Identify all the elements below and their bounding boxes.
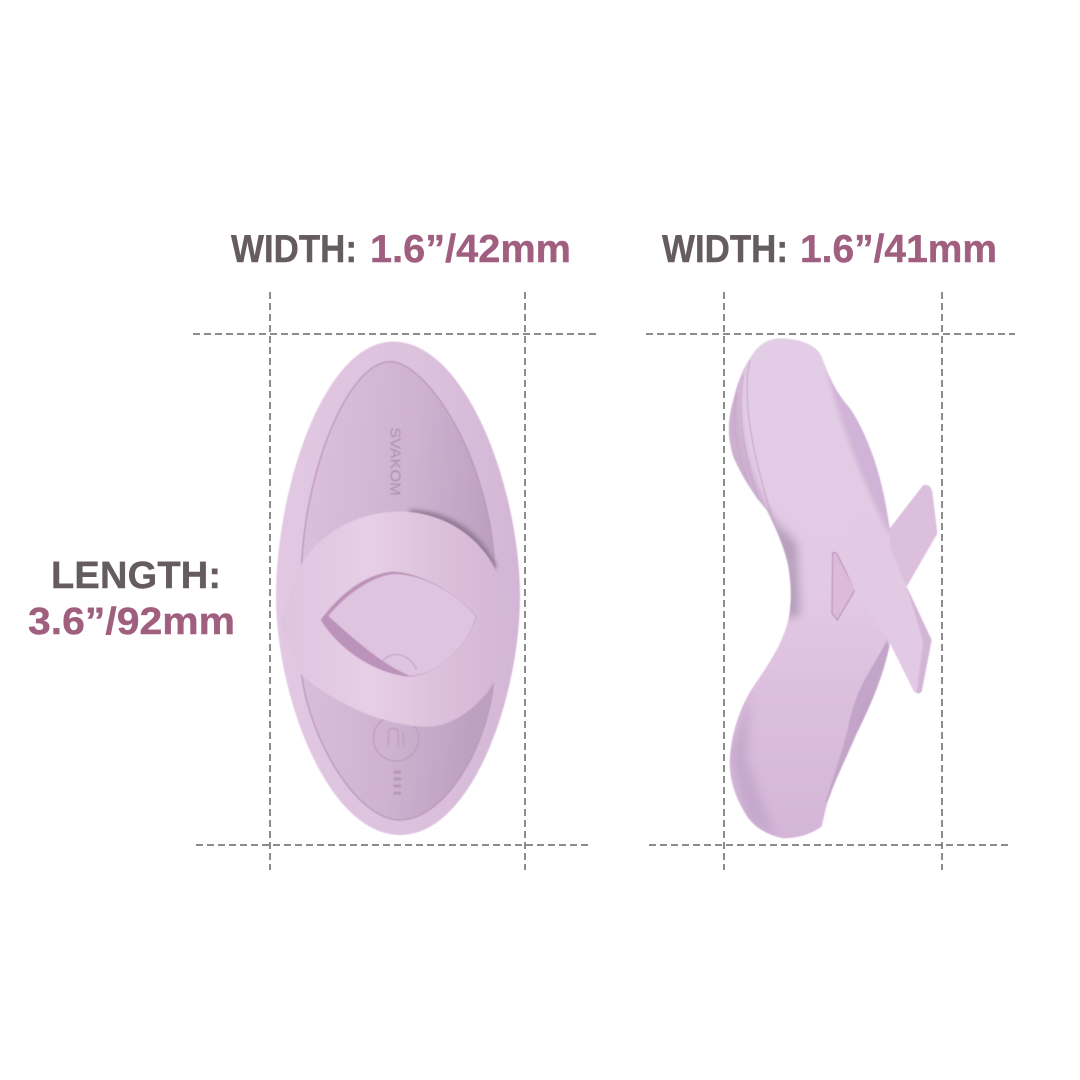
heading: side width: 1.6”/41mm xyxy=(800,228,997,271)
strap slot xyxy=(832,552,855,620)
ring opening xyxy=(321,572,477,677)
heading: side width: WIDTH: xyxy=(662,228,788,271)
label: length xyxy=(28,555,235,643)
ridge shade xyxy=(728,367,774,520)
lower left shade xyxy=(730,710,770,833)
strap lower edge shade xyxy=(907,587,932,693)
neck shade xyxy=(770,516,804,621)
cast shadow of ring xyxy=(407,510,497,573)
opening inner surface xyxy=(328,574,476,676)
label: length: LENGTH: xyxy=(51,555,221,597)
dimension guides: side view xyxy=(646,292,1015,870)
rear strap xyxy=(883,485,937,587)
heading: side width xyxy=(662,228,997,271)
product: front view xyxy=(276,342,520,835)
main body xyxy=(729,338,890,838)
dimension guides: front view xyxy=(193,292,597,870)
body shading xyxy=(728,367,890,839)
rear lobe shade xyxy=(830,693,870,797)
rear lobe xyxy=(826,640,890,802)
indicator dots xyxy=(393,771,401,795)
power button xyxy=(373,716,419,761)
ring band xyxy=(300,512,496,727)
heading: front width: WIDTH: xyxy=(231,228,357,271)
product: side view xyxy=(720,338,937,840)
outer rim xyxy=(276,342,520,835)
rear upper shade xyxy=(827,372,890,533)
label: length: 3.6”/92mm xyxy=(28,601,235,643)
front strap xyxy=(842,517,932,693)
logo text: SVAKOM xyxy=(387,427,403,496)
ridges xyxy=(734,360,772,515)
recessed plate xyxy=(302,362,495,820)
motor bump xyxy=(380,655,417,670)
heading: front width xyxy=(231,228,571,271)
heading: front width: 1.6”/42mm xyxy=(370,228,571,271)
